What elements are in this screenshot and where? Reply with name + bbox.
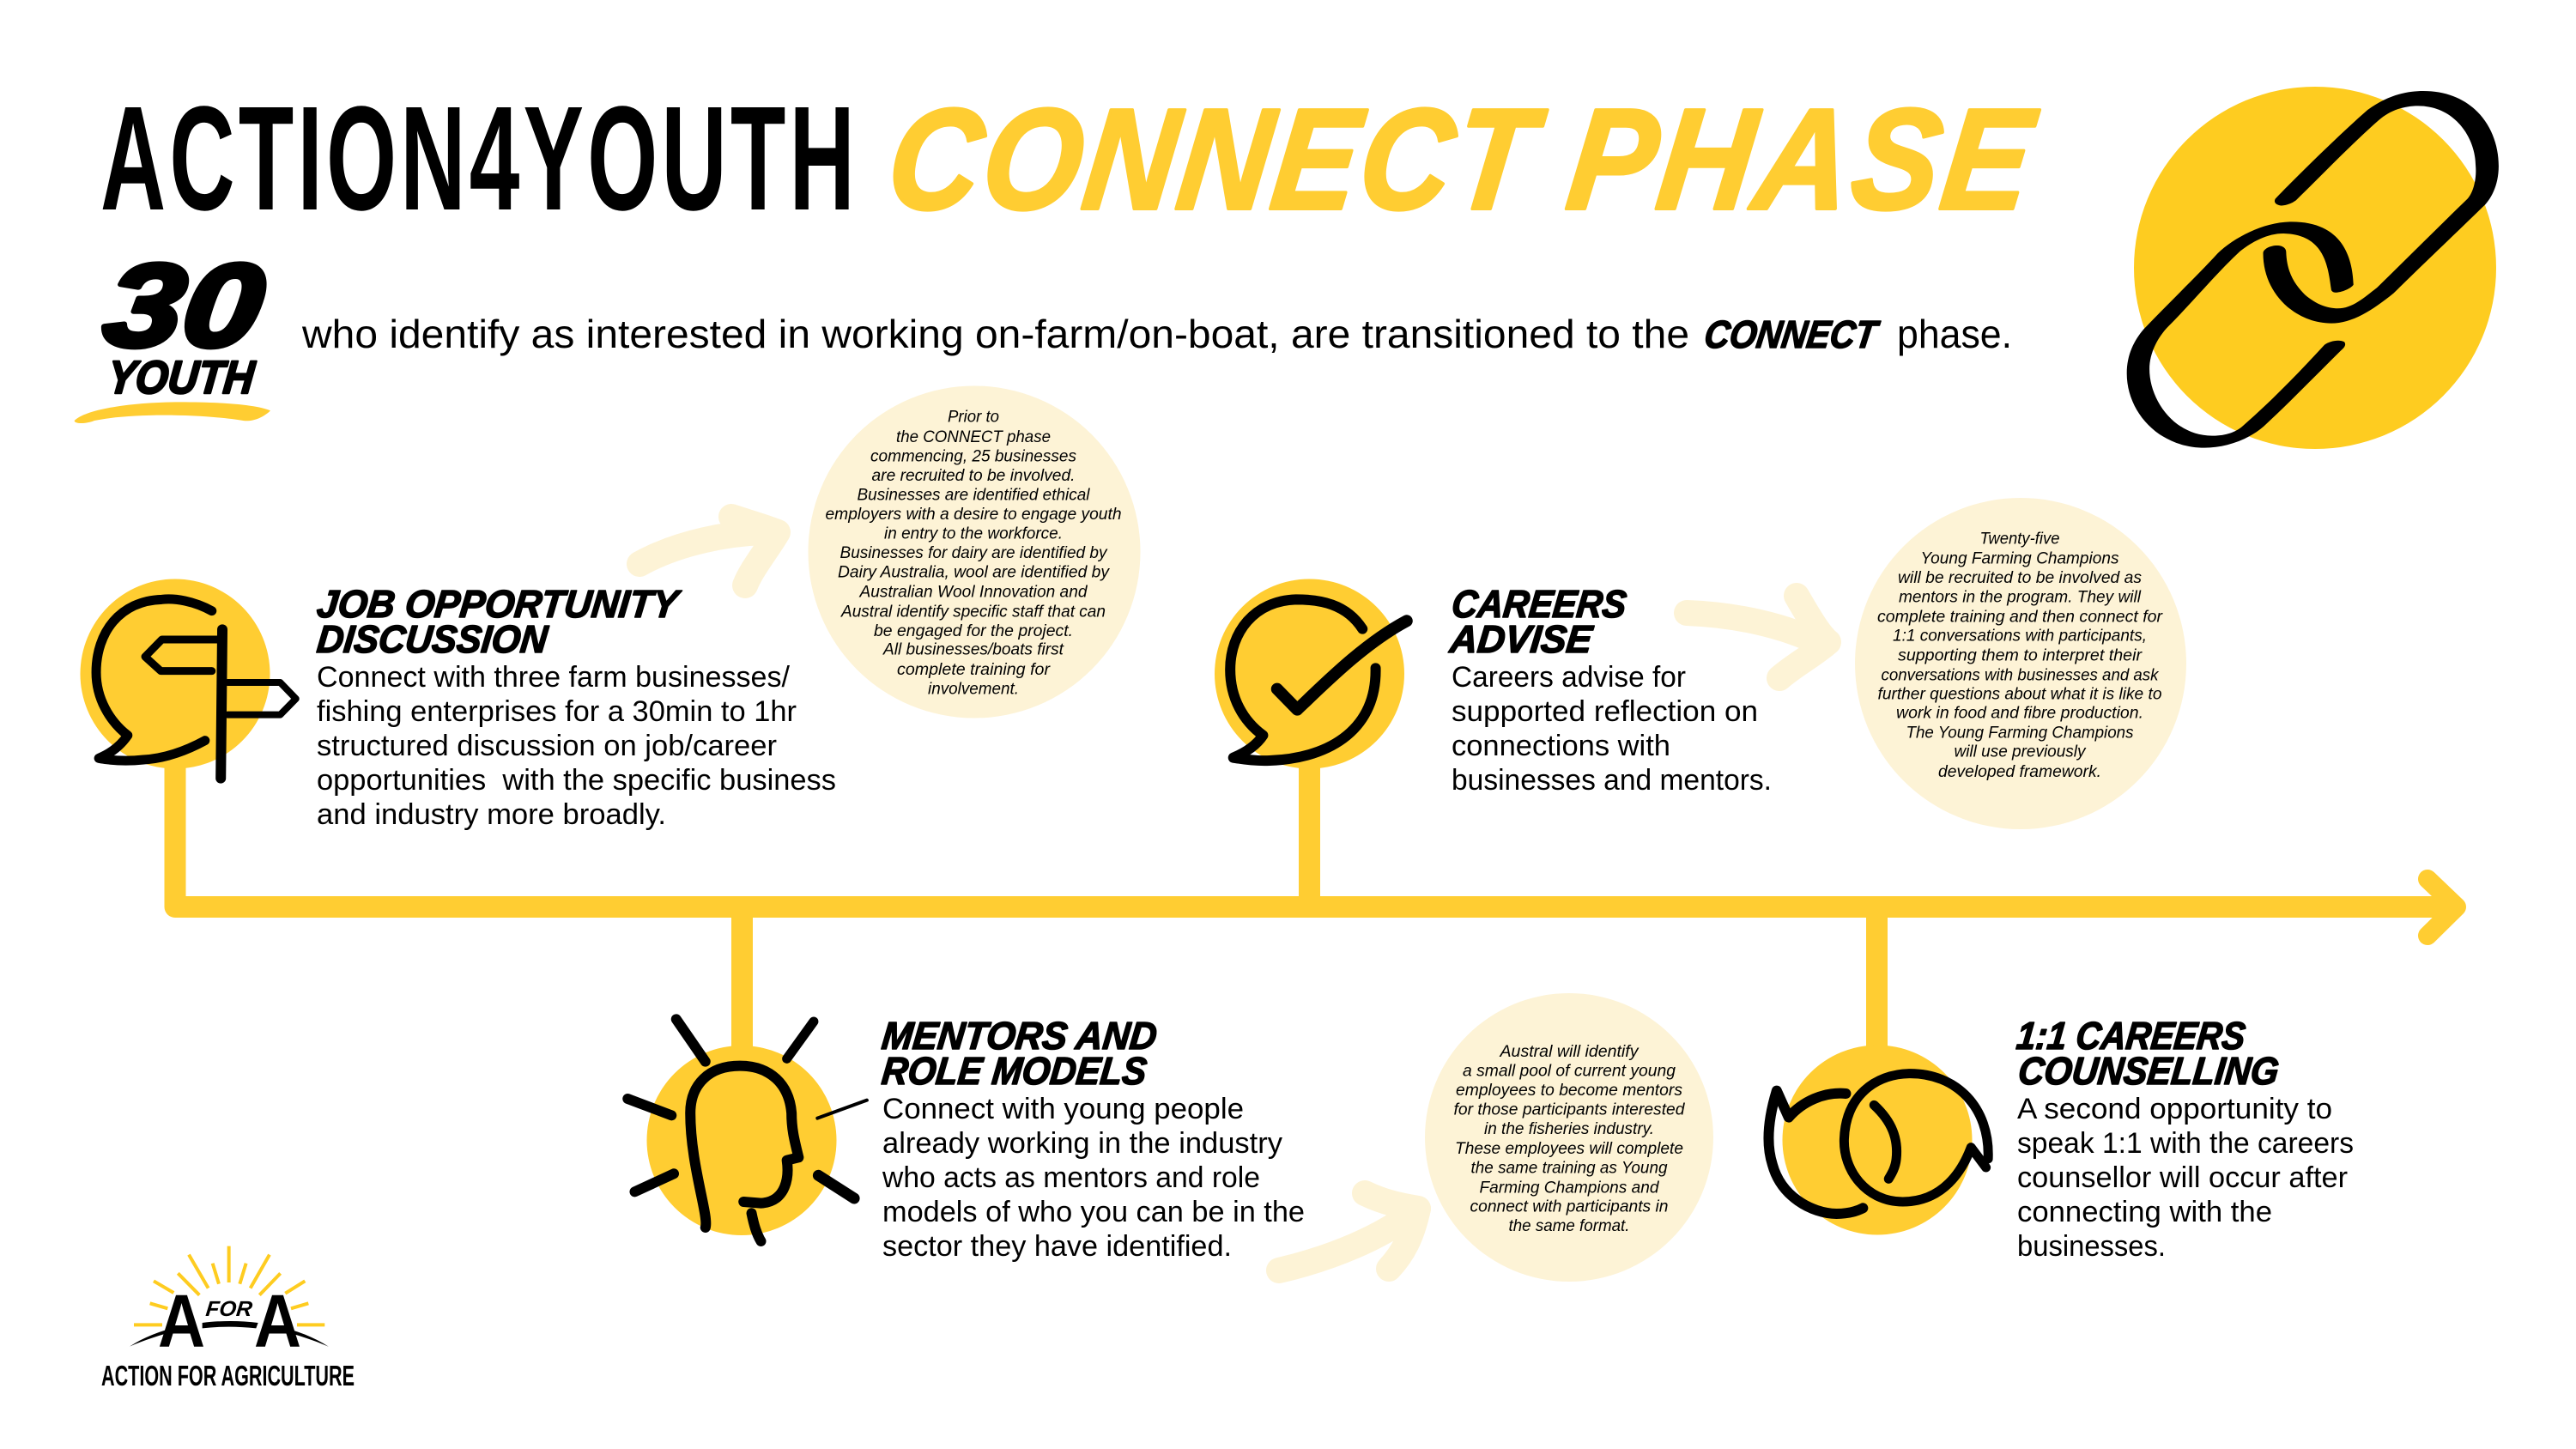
icon: signpost speech bubble (81, 579, 296, 779)
callout: austral mentors note (1425, 993, 1713, 1282)
text block: careers advise body: supported reflection on (1452, 695, 1758, 728)
heading: 1:1 careers counselling (2015, 1014, 2281, 1093)
callout: young farming champions note: work in food and fibre production. (1896, 704, 2143, 723)
title: Action4Youth Connect Phase: ACTION4YOUTH (100, 75, 858, 241)
text block: mentors body: models of who you can be in the (882, 1196, 1305, 1228)
callout: austral mentors note: Austral will identify (1499, 1042, 1640, 1061)
callout: young farming champions note: 1:1 conversations with participants, (1893, 627, 2147, 646)
text block: job opportunity body (317, 661, 836, 831)
callout: austral mentors note: a small pool of current young (1463, 1061, 1676, 1080)
callout: young farming champions note: The Young Farming Champions (1906, 723, 2134, 742)
callout: businesses recruited note: the CONNECT phase (896, 427, 1051, 446)
callout: businesses recruited note: Austral identify specific staff that can (840, 602, 1106, 621)
callout: 30 youth: YOUTH (106, 352, 258, 403)
icon: circular arrows (1769, 1046, 1988, 1234)
heading: 1:1 careers counselling: 1:1 CAREERS (2015, 1014, 2247, 1058)
callout: businesses recruited note: employers with a desire to engage youth (826, 505, 1121, 524)
callout: businesses recruited note: Dairy Australia, wool are identified by (838, 563, 1110, 582)
text block: careers advise body: Careers advise for (1452, 661, 1686, 694)
text block: job opportunity body: structured discussion on job/career (317, 730, 777, 762)
callout: businesses recruited note (809, 386, 1140, 718)
callout: austral mentors note: for those participants interested (1454, 1100, 1686, 1119)
text block: job opportunity body: and industry more broadly. (317, 798, 666, 831)
arrow: to businesses note (639, 517, 778, 585)
callout: young farming champions note: will use previously (1954, 743, 2087, 761)
callout: young farming champions note: will be recruited to be involved as (1898, 568, 2142, 587)
text block: job opportunity body: fishing enterprises for a 30min to 1hr (317, 695, 797, 728)
text block: mentors body: who acts as mentors and role (882, 1161, 1260, 1194)
callout: businesses recruited note: All businesses/boats first (882, 640, 1065, 659)
heading: mentors and role models: MENTORS AND (880, 1014, 1159, 1058)
icon: check mark speech bubble (1215, 579, 1407, 769)
callout: young farming champions note: complete training and then connect for (1877, 607, 2163, 626)
logo: action for agriculture: ACTION FOR AGRICULTURE (101, 1360, 355, 1391)
heading: 1:1 careers counselling: COUNSELLING (2016, 1049, 2281, 1093)
callout: austral mentors note: employees to become mentors (1456, 1081, 1682, 1100)
text block: mentors body (882, 1093, 1305, 1263)
callout: 30 youth (75, 240, 271, 423)
callout: austral mentors note: the same format. (1509, 1216, 1629, 1235)
text block: counselling body: speak 1:1 with the careers (2017, 1127, 2354, 1160)
logo: action for agriculture (101, 1246, 355, 1391)
callout: businesses recruited note: be engaged for the project. (874, 621, 1073, 640)
panel: mentors and role models (627, 1014, 1305, 1263)
text block: intro sentence: CONNECT (1702, 312, 1882, 356)
heading: careers advise: CAREERS (1450, 582, 1628, 626)
panel: job opportunity discussion (81, 579, 836, 831)
text block: careers advise body (1452, 661, 1772, 797)
callout: young farming champions note: further questions about what it is like to (1878, 684, 2162, 703)
callout: 30 youth: 30 (97, 240, 271, 372)
logo: action for agriculture: A (254, 1280, 301, 1363)
callout: businesses recruited note: Businesses for dairy are identified by (839, 543, 1108, 562)
callout: austral mentors note: connect with participants in (1470, 1197, 1669, 1216)
heading: careers advise: ADVISE (1447, 617, 1596, 661)
title: Action4Youth Connect Phase (100, 75, 2044, 241)
text block: mentors body: already working in the industry (882, 1127, 1282, 1160)
logo: action for agriculture: FOR (204, 1297, 253, 1321)
title: Action4Youth Connect Phase: PHASE (1561, 79, 2044, 239)
text block: careers advise body: businesses and mentors. (1452, 764, 1772, 797)
callout: young farming champions note: developed framework. (1938, 762, 2101, 781)
text block: counselling body: counsellor will occur after (2017, 1161, 2348, 1194)
callout: young farming champions note: supporting them to interpret their (1898, 646, 2143, 664)
title: Action4Youth Connect Phase: CONNECT (881, 79, 1552, 239)
callout: austral mentors note: in the fisheries industry. (1484, 1119, 1654, 1138)
callout: businesses recruited note: are recruited to be involved. (872, 466, 1075, 485)
callout: young farming champions note: conversations with businesses and ask (1882, 665, 2160, 684)
text block: careers advise body: connections with (1452, 730, 1670, 762)
panel: 1:1 careers counselling (1769, 1014, 2354, 1263)
callout: austral mentors note: the same training as Young (1471, 1159, 1668, 1178)
callout: businesses recruited note: involvement. (928, 679, 1019, 698)
heading: mentors and role models: ROLE MODELS (880, 1049, 1149, 1093)
callout: young farming champions note (1855, 498, 2186, 829)
callout: young farming champions note: mentors in the program. They will (1899, 588, 2142, 607)
callout: businesses recruited note: Prior to (948, 408, 999, 427)
heading: mentors and role models (880, 1014, 1159, 1093)
logo: action for agriculture: A (158, 1280, 205, 1363)
timeline arrow with stems (175, 755, 2457, 1056)
callout: young farming champions note: Twenty-five (1979, 529, 2060, 548)
callout: businesses recruited note: complete training for (897, 660, 1052, 679)
callout: businesses recruited note: commencing, 25 businesses (870, 446, 1076, 465)
panel: careers advise (1215, 579, 1772, 797)
text block: mentors body: sector they have identified. (882, 1230, 1232, 1263)
heading: job opportunity discussion: JOB OPPORTUNITY (315, 582, 683, 626)
text block: counselling body (2017, 1093, 2354, 1263)
text block: counselling body: connecting with the (2017, 1196, 2272, 1228)
callout: austral mentors note: These employees will complete (1455, 1139, 1683, 1158)
text block: mentors body: Connect with young people (882, 1093, 1244, 1125)
text block: job opportunity body: opportunities with the specific business (317, 764, 836, 797)
text block: counselling body: A second opportunity to (2017, 1093, 2332, 1125)
heading: careers advise (1447, 582, 1628, 661)
callout: young farming champions note: Young Farming Champions (1921, 549, 2119, 568)
callout: businesses recruited note: Australian Wool Innovation and (859, 583, 1088, 602)
text block: intro sentence: phase. (1897, 312, 2012, 356)
text block: job opportunity body: Connect with three farm businesses/ (317, 661, 791, 694)
icon: chain link on yellow circle (2127, 87, 2499, 449)
callout: austral mentors note: Farming Champions and (1480, 1178, 1660, 1197)
arrow: to austral note (1279, 1193, 1418, 1270)
heading: job opportunity discussion (315, 582, 683, 661)
callout: businesses recruited note: Businesses are identified ethical (857, 486, 1090, 505)
heading: job opportunity discussion: DISCUSSION (315, 617, 551, 661)
text block: intro sentence: who identify as interested in working on-farm/on-boat, are transitioned to the (301, 312, 1689, 356)
callout: businesses recruited note: in entry to the workforce. (884, 524, 1063, 543)
arrow: to young farming champions note (1687, 596, 1828, 678)
text block: counselling body: businesses. (2017, 1230, 2166, 1263)
icon: head with rays (627, 1019, 867, 1241)
